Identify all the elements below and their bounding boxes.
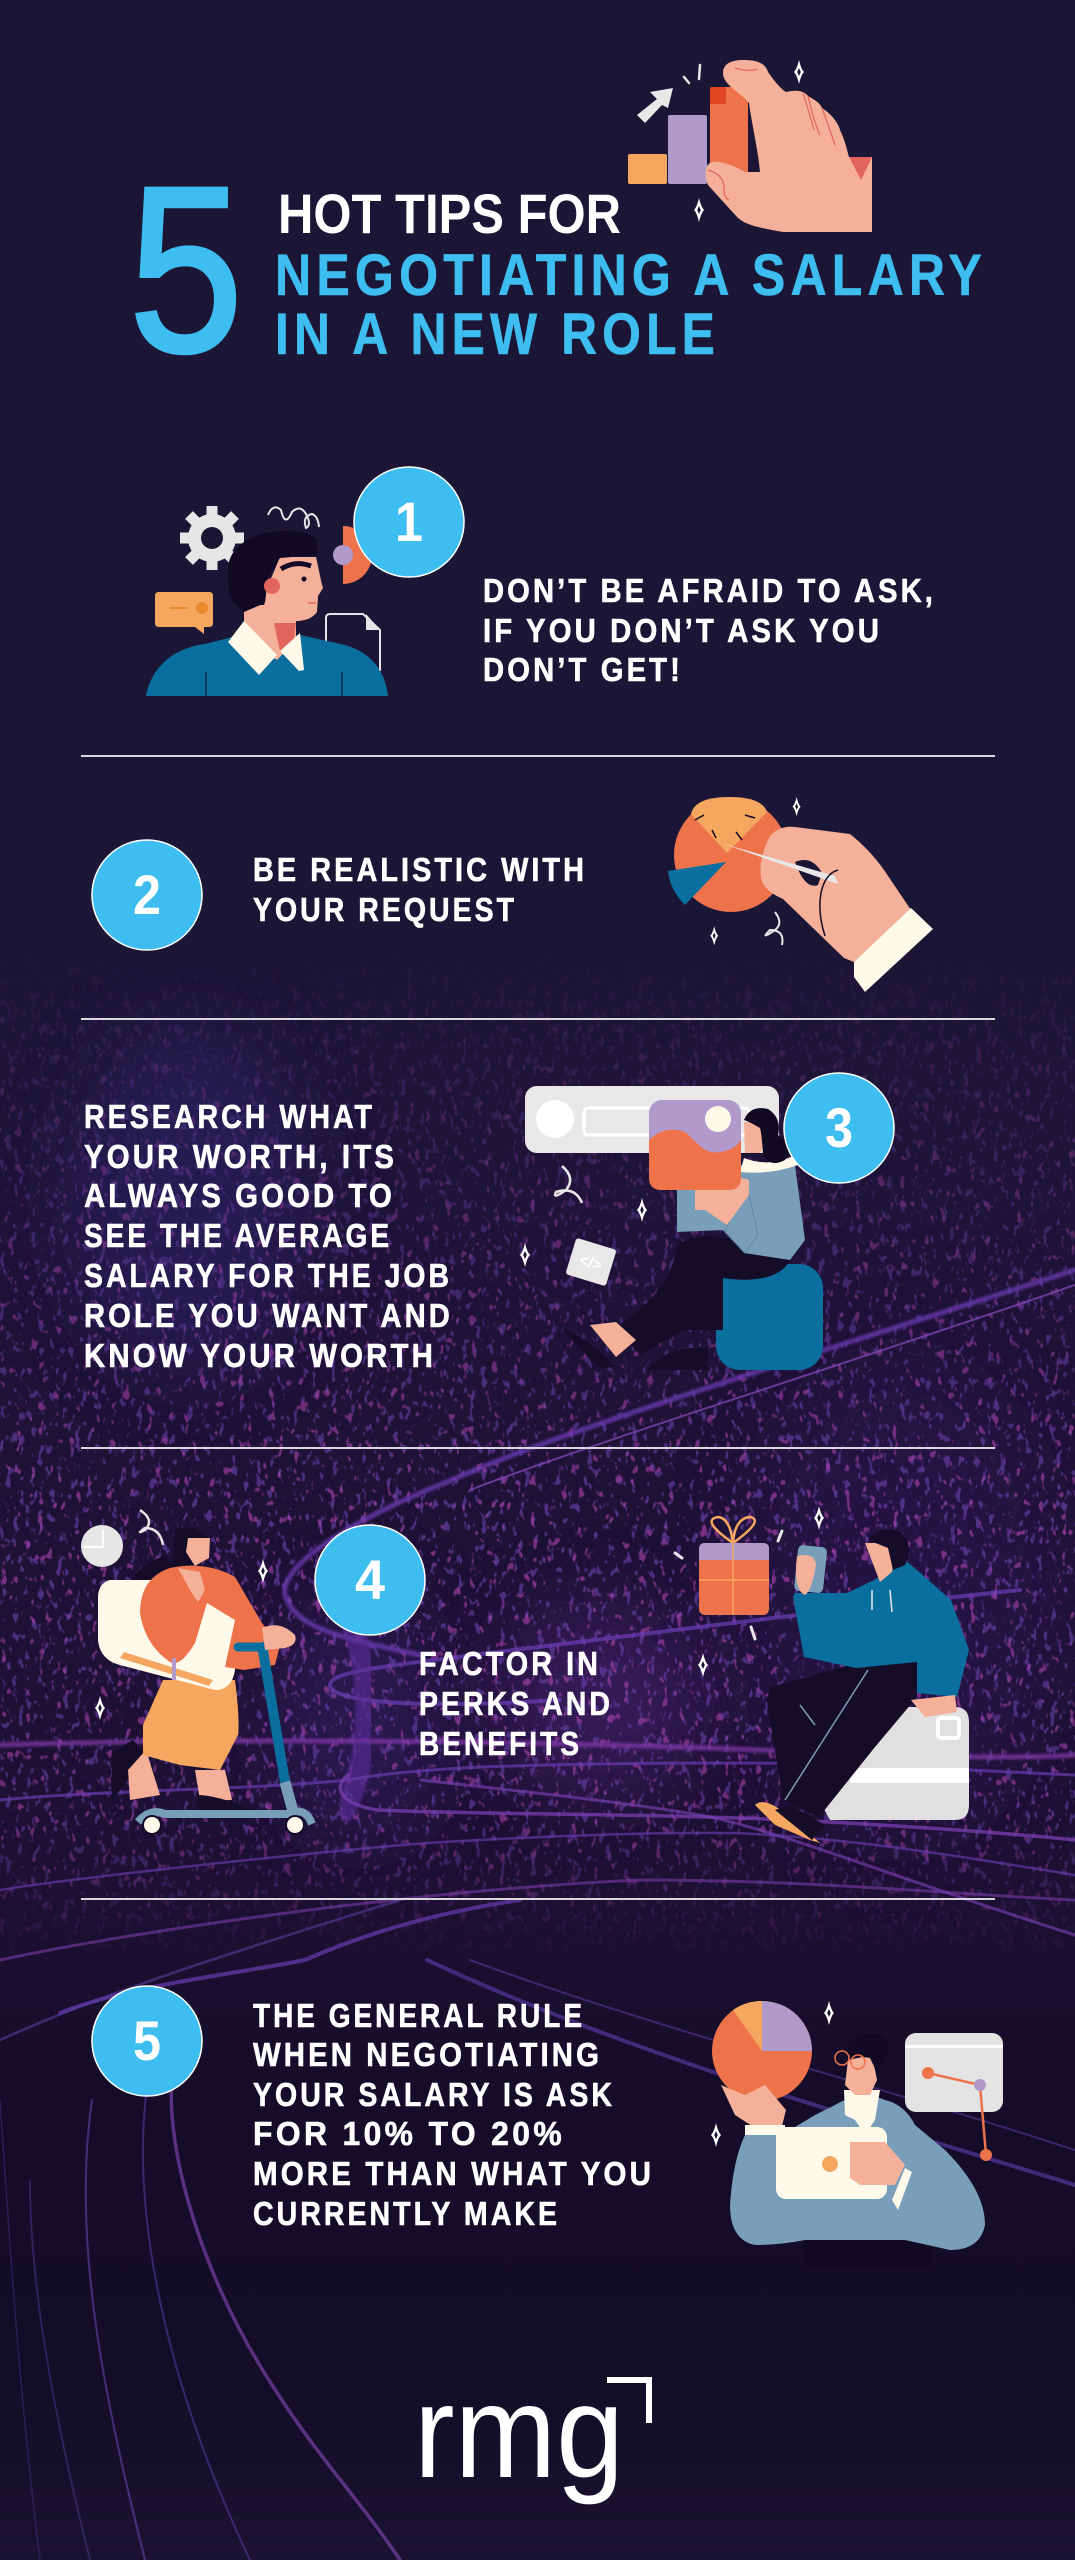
number badge 5: 5	[133, 2009, 161, 2072]
number badge 3	[784, 1073, 894, 1183]
illustration: thinking man	[146, 506, 388, 696]
tip text 4: PERKS AND	[419, 1685, 613, 1722]
icon: hand raising bar chart	[628, 60, 872, 232]
suitcase	[819, 1707, 969, 1820]
tip text 2: BE REALISTIC WITH	[253, 851, 587, 888]
big number 5: 5	[129, 138, 243, 402]
tip text 5: THE GENERAL RULE	[253, 1997, 585, 2034]
tip text 5: CURRENTLY MAKE	[253, 2195, 560, 2232]
tip text 5: WHEN NEGOTIATING	[253, 2036, 602, 2073]
step 4	[81, 1506, 969, 1843]
illustration: woman on scooter	[81, 1510, 312, 1834]
tip text 3: KNOW YOUR WORTH	[84, 1337, 436, 1374]
chart card	[905, 2033, 1003, 2161]
tip text 4: FACTOR IN	[419, 1645, 601, 1682]
number badge 3: 3	[825, 1096, 853, 1159]
tip text 3: SALARY FOR THE JOB	[84, 1257, 452, 1294]
tip text 5: MORE THAN WHAT YOU	[253, 2155, 654, 2192]
scooter	[138, 1640, 312, 1834]
step 1	[146, 467, 936, 696]
tip text 5: FOR 10% TO 20%	[253, 2115, 565, 2152]
number badge 1: 1	[395, 490, 423, 553]
gear	[180, 506, 244, 570]
tip text 4: BENEFITS	[419, 1725, 582, 1762]
number badge 4: 4	[355, 1548, 385, 1611]
tip text 2	[253, 851, 587, 928]
tip text 5: YOUR SALARY IS ASK	[253, 2076, 615, 2113]
title	[129, 138, 987, 402]
tip text 3: ROLE YOU WANT AND	[84, 1297, 453, 1334]
tip text 3: RESEARCH WHAT	[84, 1098, 375, 1135]
number badge 2: 2	[133, 863, 161, 926]
number badge 5	[92, 1986, 202, 2096]
number badge 4	[315, 1525, 425, 1635]
gift	[699, 1517, 769, 1615]
code card: </>	[577, 1252, 604, 1275]
step 2	[92, 797, 933, 992]
heading line: in a new role: IN A NEW ROLE	[275, 302, 720, 367]
tip text 1: IF YOU DON’T ASK YOU	[483, 612, 882, 649]
background	[0, 964, 1075, 2560]
heading line: hot tips for: HOT TIPS FOR	[278, 182, 621, 245]
illustration: hand with pie chart	[668, 797, 933, 992]
tip text 3: ALWAYS GOOD TO	[84, 1177, 395, 1214]
bag	[98, 1580, 235, 1690]
tip text 4	[419, 1645, 613, 1762]
illustration: woman on stool with search bar	[520, 1086, 823, 1370]
tip text 1	[483, 572, 936, 688]
tip text 3: SEE THE AVERAGE	[84, 1217, 392, 1254]
step 3	[84, 1073, 894, 1374]
number badge 2	[92, 840, 202, 950]
logo: rmg: rmg	[414, 2358, 624, 2505]
code card	[565, 1238, 617, 1286]
tip text 1: DON’T BE AFRAID TO ASK,	[483, 572, 936, 609]
tip text 2: YOUR REQUEST	[253, 891, 517, 928]
step 5	[92, 1986, 1003, 2267]
tip text 5	[253, 1997, 654, 2232]
pie chart	[712, 2001, 812, 2101]
heading line: negotiating a salary: NEGOTIATING A SALARY	[275, 243, 987, 308]
tip text 3: YOUR WORTH, ITS	[84, 1138, 397, 1175]
illustration: man with pie chart and tablet	[711, 2001, 1003, 2267]
illustration: man with gift on suitcase	[675, 1506, 969, 1843]
tip text 1: DON’T GET!	[483, 651, 683, 688]
tip text 3	[84, 1098, 453, 1374]
number badge 1	[354, 467, 464, 577]
